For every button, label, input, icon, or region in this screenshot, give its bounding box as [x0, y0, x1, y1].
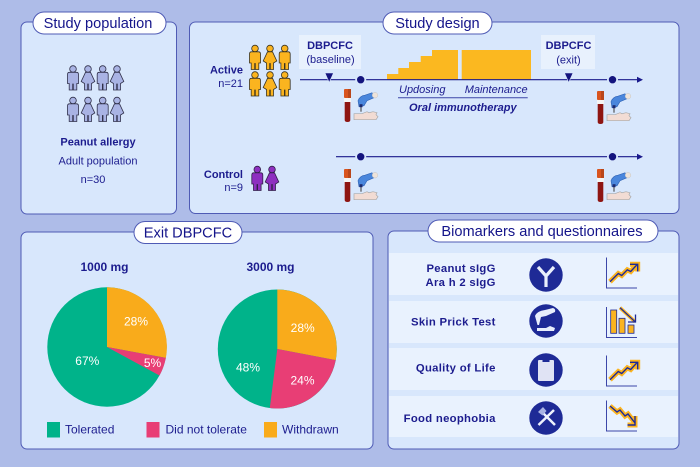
- chart: falling bars: [606, 307, 637, 338]
- row: quality of life: [389, 348, 678, 390]
- heading: 3000 mg: 3000 mg: [246, 260, 295, 274]
- callout: DBPCFC exit: (exit): [556, 54, 581, 66]
- label: active group: [210, 64, 243, 90]
- legend: Withdrawn: [282, 422, 339, 436]
- heading: exit DBPCFC: Exit DBPCFC: [144, 226, 232, 242]
- icon: patient group: [68, 66, 124, 122]
- label: active group: n=21: [218, 78, 243, 90]
- timeline: active arm: [300, 73, 643, 85]
- labels: treatment phases: Maintenance: [465, 84, 528, 96]
- row: food neophobia: Food neophobia: [404, 413, 496, 425]
- pie chart: 3000 mg: 28%: [291, 321, 315, 335]
- heading: study population: [33, 12, 166, 34]
- panel: biomarkers and questionnaires: [388, 220, 679, 449]
- label: control group: Control: [204, 169, 243, 181]
- icon: blood tube and skin prick, active baseline: [344, 89, 378, 122]
- panel: study population: [21, 12, 176, 214]
- chart: falling trend: [606, 400, 637, 431]
- icon: control participants: [252, 166, 279, 190]
- row: peanut sIgG: Ara h 2 sIgG: [426, 277, 496, 289]
- labels: treatment phases: Oral immunotherapy: [409, 102, 517, 114]
- icon: blood tube and skin prick, control exit: [597, 169, 631, 202]
- legend: Did not tolerate: [166, 422, 247, 436]
- label: control group: [204, 169, 243, 194]
- pie chart: 3000 mg: [218, 290, 337, 408]
- panel: exit DBPCFC: [21, 222, 373, 449]
- icon: fork and knife: [529, 401, 563, 435]
- heading: study population: Study population: [44, 16, 152, 32]
- chart: rising trend: [606, 258, 638, 288]
- heading: study design: [383, 12, 492, 34]
- chart: oral immunotherapy dose steps: [387, 50, 531, 80]
- icon: active participants: [250, 45, 290, 96]
- row: quality of life: Quality of Life: [416, 363, 496, 375]
- pie chart: 3000 mg: 24%: [290, 374, 315, 388]
- heading: 1000 mg: 1000 mg: [80, 260, 129, 274]
- icon: blood tube and skin prick, control baseline: [344, 169, 378, 202]
- label: active group: Active: [210, 64, 243, 76]
- text: population details: n=30: [81, 174, 105, 186]
- label: control group: n=9: [224, 182, 243, 194]
- labels: treatment phases: Updosing: [399, 84, 446, 96]
- pie chart: 3000 mg: 48%: [236, 360, 260, 374]
- row: skin prick test: Skin Prick Test: [411, 317, 496, 329]
- callout: DBPCFC exit: [541, 35, 595, 69]
- timeline: control arm: [336, 151, 643, 162]
- pie chart: 1000 mg: 28%: [124, 314, 148, 328]
- heading: study design: Study design: [395, 16, 480, 32]
- chart: rising trend: [606, 356, 638, 386]
- icon: clipboard: [529, 353, 563, 387]
- icon: antibody: [529, 258, 563, 292]
- row: peanut sIgG: Peanut sIgG: [426, 263, 496, 275]
- row: peanut sIgG: [389, 253, 678, 295]
- callout: DBPCFC baseline: (baseline): [306, 54, 355, 66]
- callout: DBPCFC exit: DBPCFC: [546, 40, 591, 52]
- text: population details: [59, 136, 137, 186]
- heading: biomarkers and questionnaires: Biomarkers and questionnaires: [441, 224, 643, 240]
- row: food neophobia: [389, 396, 678, 437]
- text: population details: Adult population: [59, 156, 137, 168]
- text: population details: Peanut allergy: [60, 136, 136, 148]
- heading: biomarkers and questionnaires: [428, 220, 658, 242]
- pie chart: 1000 mg: [47, 287, 167, 407]
- heading: exit DBPCFC: [134, 222, 242, 244]
- legend: [47, 422, 339, 438]
- icon: skin prick: [529, 304, 563, 338]
- legend: Tolerated: [65, 422, 114, 436]
- labels: treatment phases: [398, 84, 528, 114]
- callout: DBPCFC baseline: DBPCFC: [307, 40, 353, 52]
- pie chart: 1000 mg: 67%: [75, 354, 100, 368]
- icon: blood tube and skin prick, active exit: [597, 91, 631, 124]
- row: skin prick test: [389, 301, 678, 343]
- panel: study design: [190, 12, 679, 214]
- pie chart: 1000 mg: 5%: [144, 356, 162, 370]
- callout: DBPCFC baseline: [299, 35, 361, 69]
